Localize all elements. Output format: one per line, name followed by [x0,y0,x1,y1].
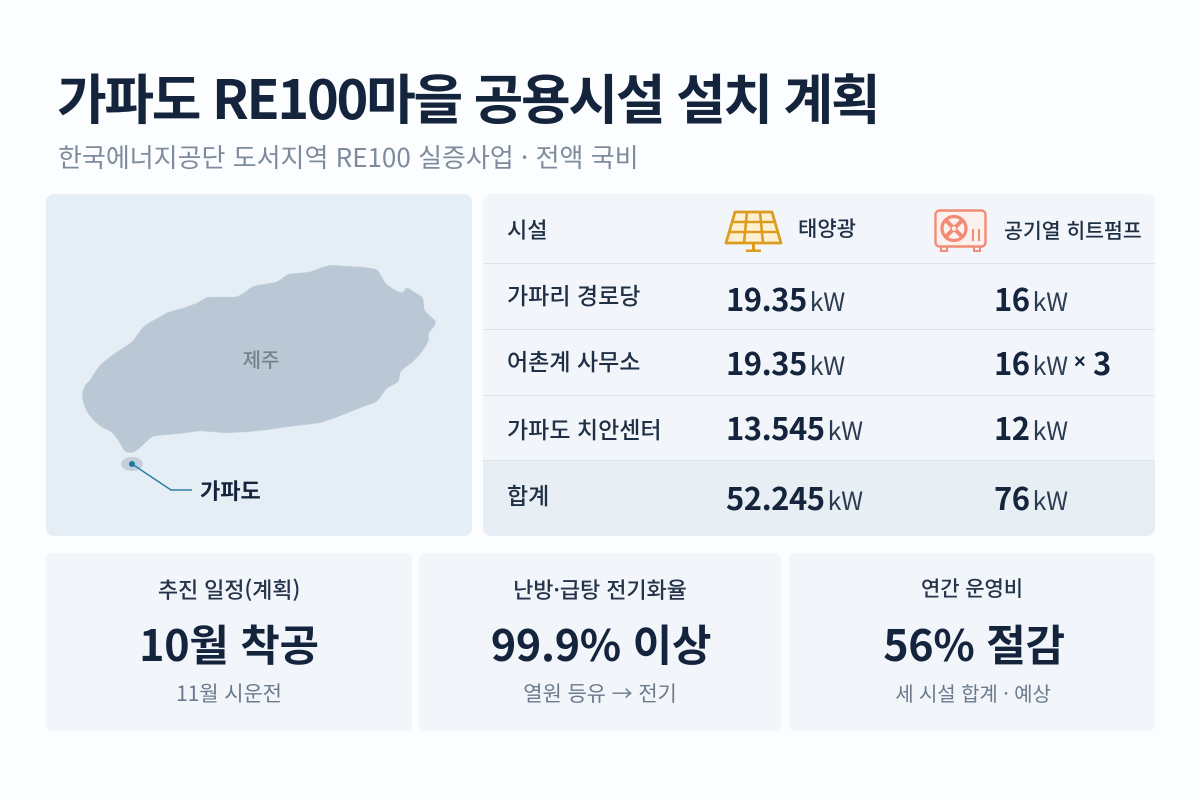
Gapado halo [121,457,143,471]
panel: electrification [419,553,781,731]
value: heat pump: 12kW [994,404,1068,449]
label: 연간 운영비 [921,573,1023,603]
header: facility: 시설 [507,213,547,245]
label: Jeju: 제주 [243,344,279,373]
panel: schedule [46,553,412,731]
leader line [132,464,192,490]
value: solar: 19.35kW [726,339,845,384]
row: total: 합계 [507,477,549,511]
value: solar: 13.545kW [726,404,863,449]
header: solar: 태양광 [798,213,856,243]
icon: heat pump [934,209,987,252]
note: 11월 시운전 [176,678,282,708]
label: 난방·급탕 전기화율 [513,573,687,605]
value: heat pump: 16kW [994,275,1068,320]
panel: facility table: 3 [1093,339,1111,384]
row: fishing association office: 어촌계 사무소 [507,343,640,377]
panel: operating cost [789,553,1155,731]
value: 99.9% 이상 [491,612,711,674]
note: 세 시설 합계 · 예상 [895,678,1051,707]
map of Jeju and Gapado [82,265,436,506]
value: 56% 절감 [883,612,1065,674]
panel: facility table: × [1074,351,1085,373]
row: Gapado police center: 가파도 치안센터 [507,411,662,445]
value: heat pump: 76kW [994,474,1068,519]
value: 10월 착공 [139,612,319,674]
icon: solar panel [724,210,782,252]
Gapado dot [129,461,135,467]
label: Gapado: 가파도 [200,474,261,506]
value: heat pump: 16kW [994,339,1068,384]
title: 가파도 RE100마을 공용시설 설치 계획 [57,56,878,135]
note: 열원 등유 → 전기 [523,678,677,708]
value: solar: 52.245kW [726,474,863,519]
value: solar: 19.35kW [726,275,845,320]
panel: map [46,194,472,536]
total row background [483,460,1155,536]
Jeju island [82,265,437,453]
panel: facility table [483,194,1155,536]
header: heat pump: 공기열 히트펌프 [1004,214,1142,244]
value: heat pump [994,339,1111,384]
label: 추진 일정(계획) [158,573,300,605]
row: Gapa-ri senior center: 가파리 경로당 [507,277,640,311]
subtitle: 한국에너지공단 도서지역 RE100 실증사업 · 전액 국비 [58,138,639,175]
